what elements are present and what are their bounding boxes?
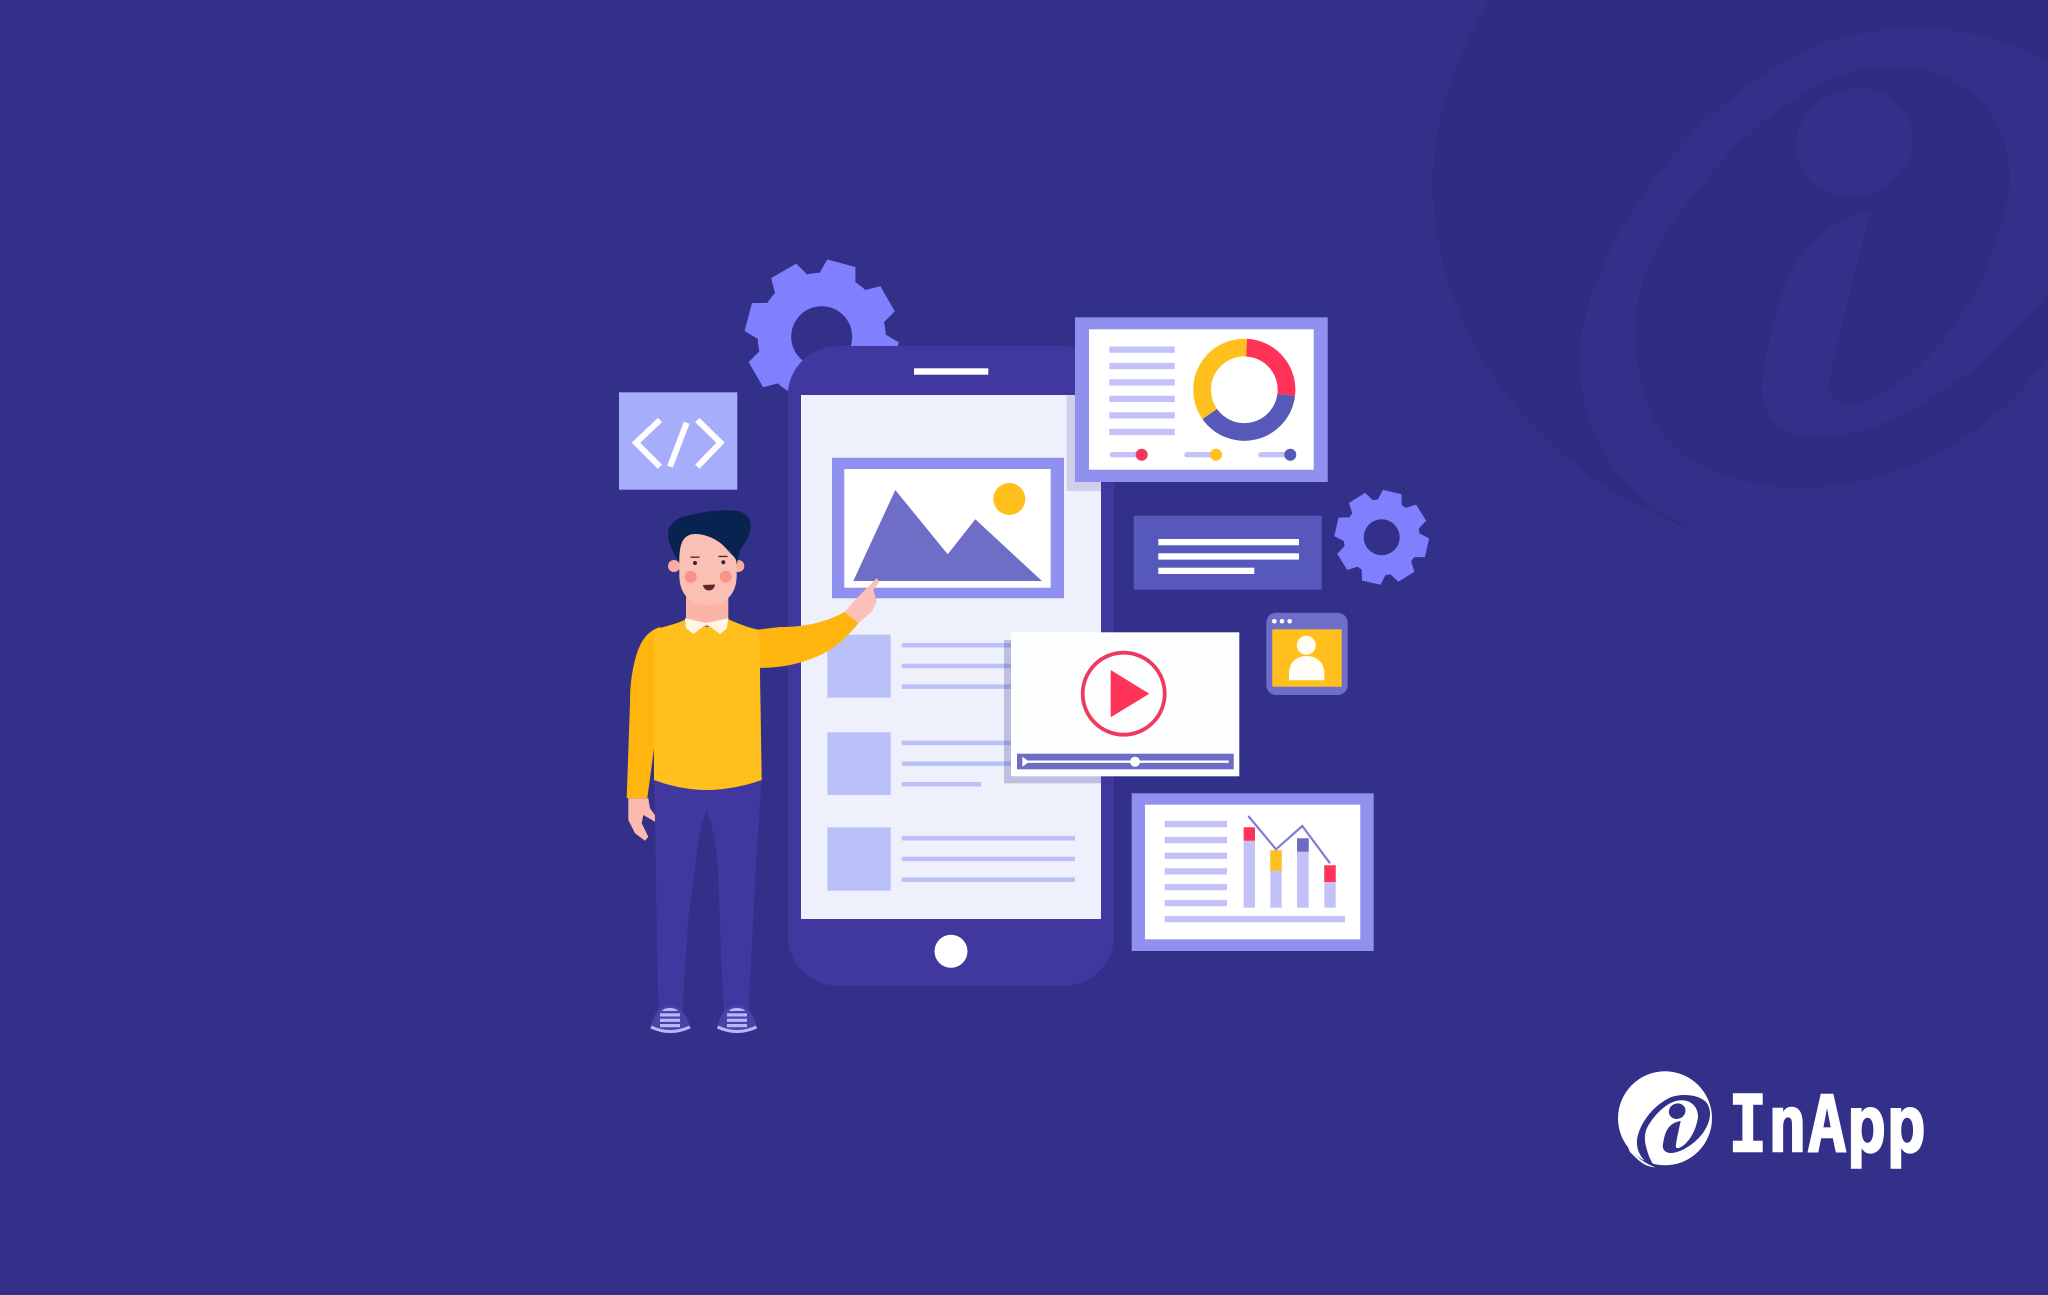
icon: code tag box	[619, 392, 737, 490]
list row 2	[827, 732, 1012, 795]
logo mark	[1618, 1071, 1712, 1168]
watermark: InApp logo mark	[1433, 0, 2048, 536]
donut chart	[1202, 348, 1287, 432]
profile window	[1266, 613, 1348, 695]
speaker	[914, 368, 988, 375]
list row 3	[827, 827, 1075, 891]
logo	[1618, 1071, 1926, 1171]
shirt collar	[685, 618, 728, 634]
trousers	[654, 778, 762, 1012]
person	[627, 510, 879, 1034]
hair back	[668, 510, 751, 565]
phone body	[788, 346, 1114, 986]
stacked bars	[1244, 827, 1336, 908]
image card	[832, 458, 1064, 598]
face	[679, 534, 737, 605]
left hand	[628, 798, 657, 841]
shoes	[651, 1005, 757, 1034]
home button	[934, 935, 968, 968]
sweater torso	[654, 619, 762, 790]
shadow: video card	[1004, 640, 1101, 783]
logo wordmark: InApp	[1728, 1081, 1926, 1171]
mouth	[703, 584, 715, 590]
text lines	[1109, 346, 1175, 435]
icon: small gear	[1333, 489, 1430, 586]
bar chart card	[1132, 793, 1374, 951]
cheeks	[685, 571, 732, 583]
progress bar	[1017, 754, 1234, 769]
text lines	[1165, 821, 1345, 922]
list row 1	[827, 635, 1012, 698]
ears	[668, 560, 744, 572]
sweater arms	[627, 612, 858, 798]
text panel	[1134, 516, 1322, 590]
legend	[1110, 449, 1296, 461]
trend line	[1248, 816, 1330, 863]
donut chart card	[1075, 317, 1328, 482]
eyes and brows	[690, 556, 728, 565]
phone	[788, 346, 1114, 986]
video player card	[1011, 632, 1239, 776]
shadow: chart card	[1067, 395, 1101, 491]
pointing hand	[845, 578, 879, 623]
icon: large gear	[743, 258, 900, 415]
phone screen	[801, 395, 1101, 919]
neck	[686, 590, 728, 626]
play button	[1083, 653, 1165, 735]
